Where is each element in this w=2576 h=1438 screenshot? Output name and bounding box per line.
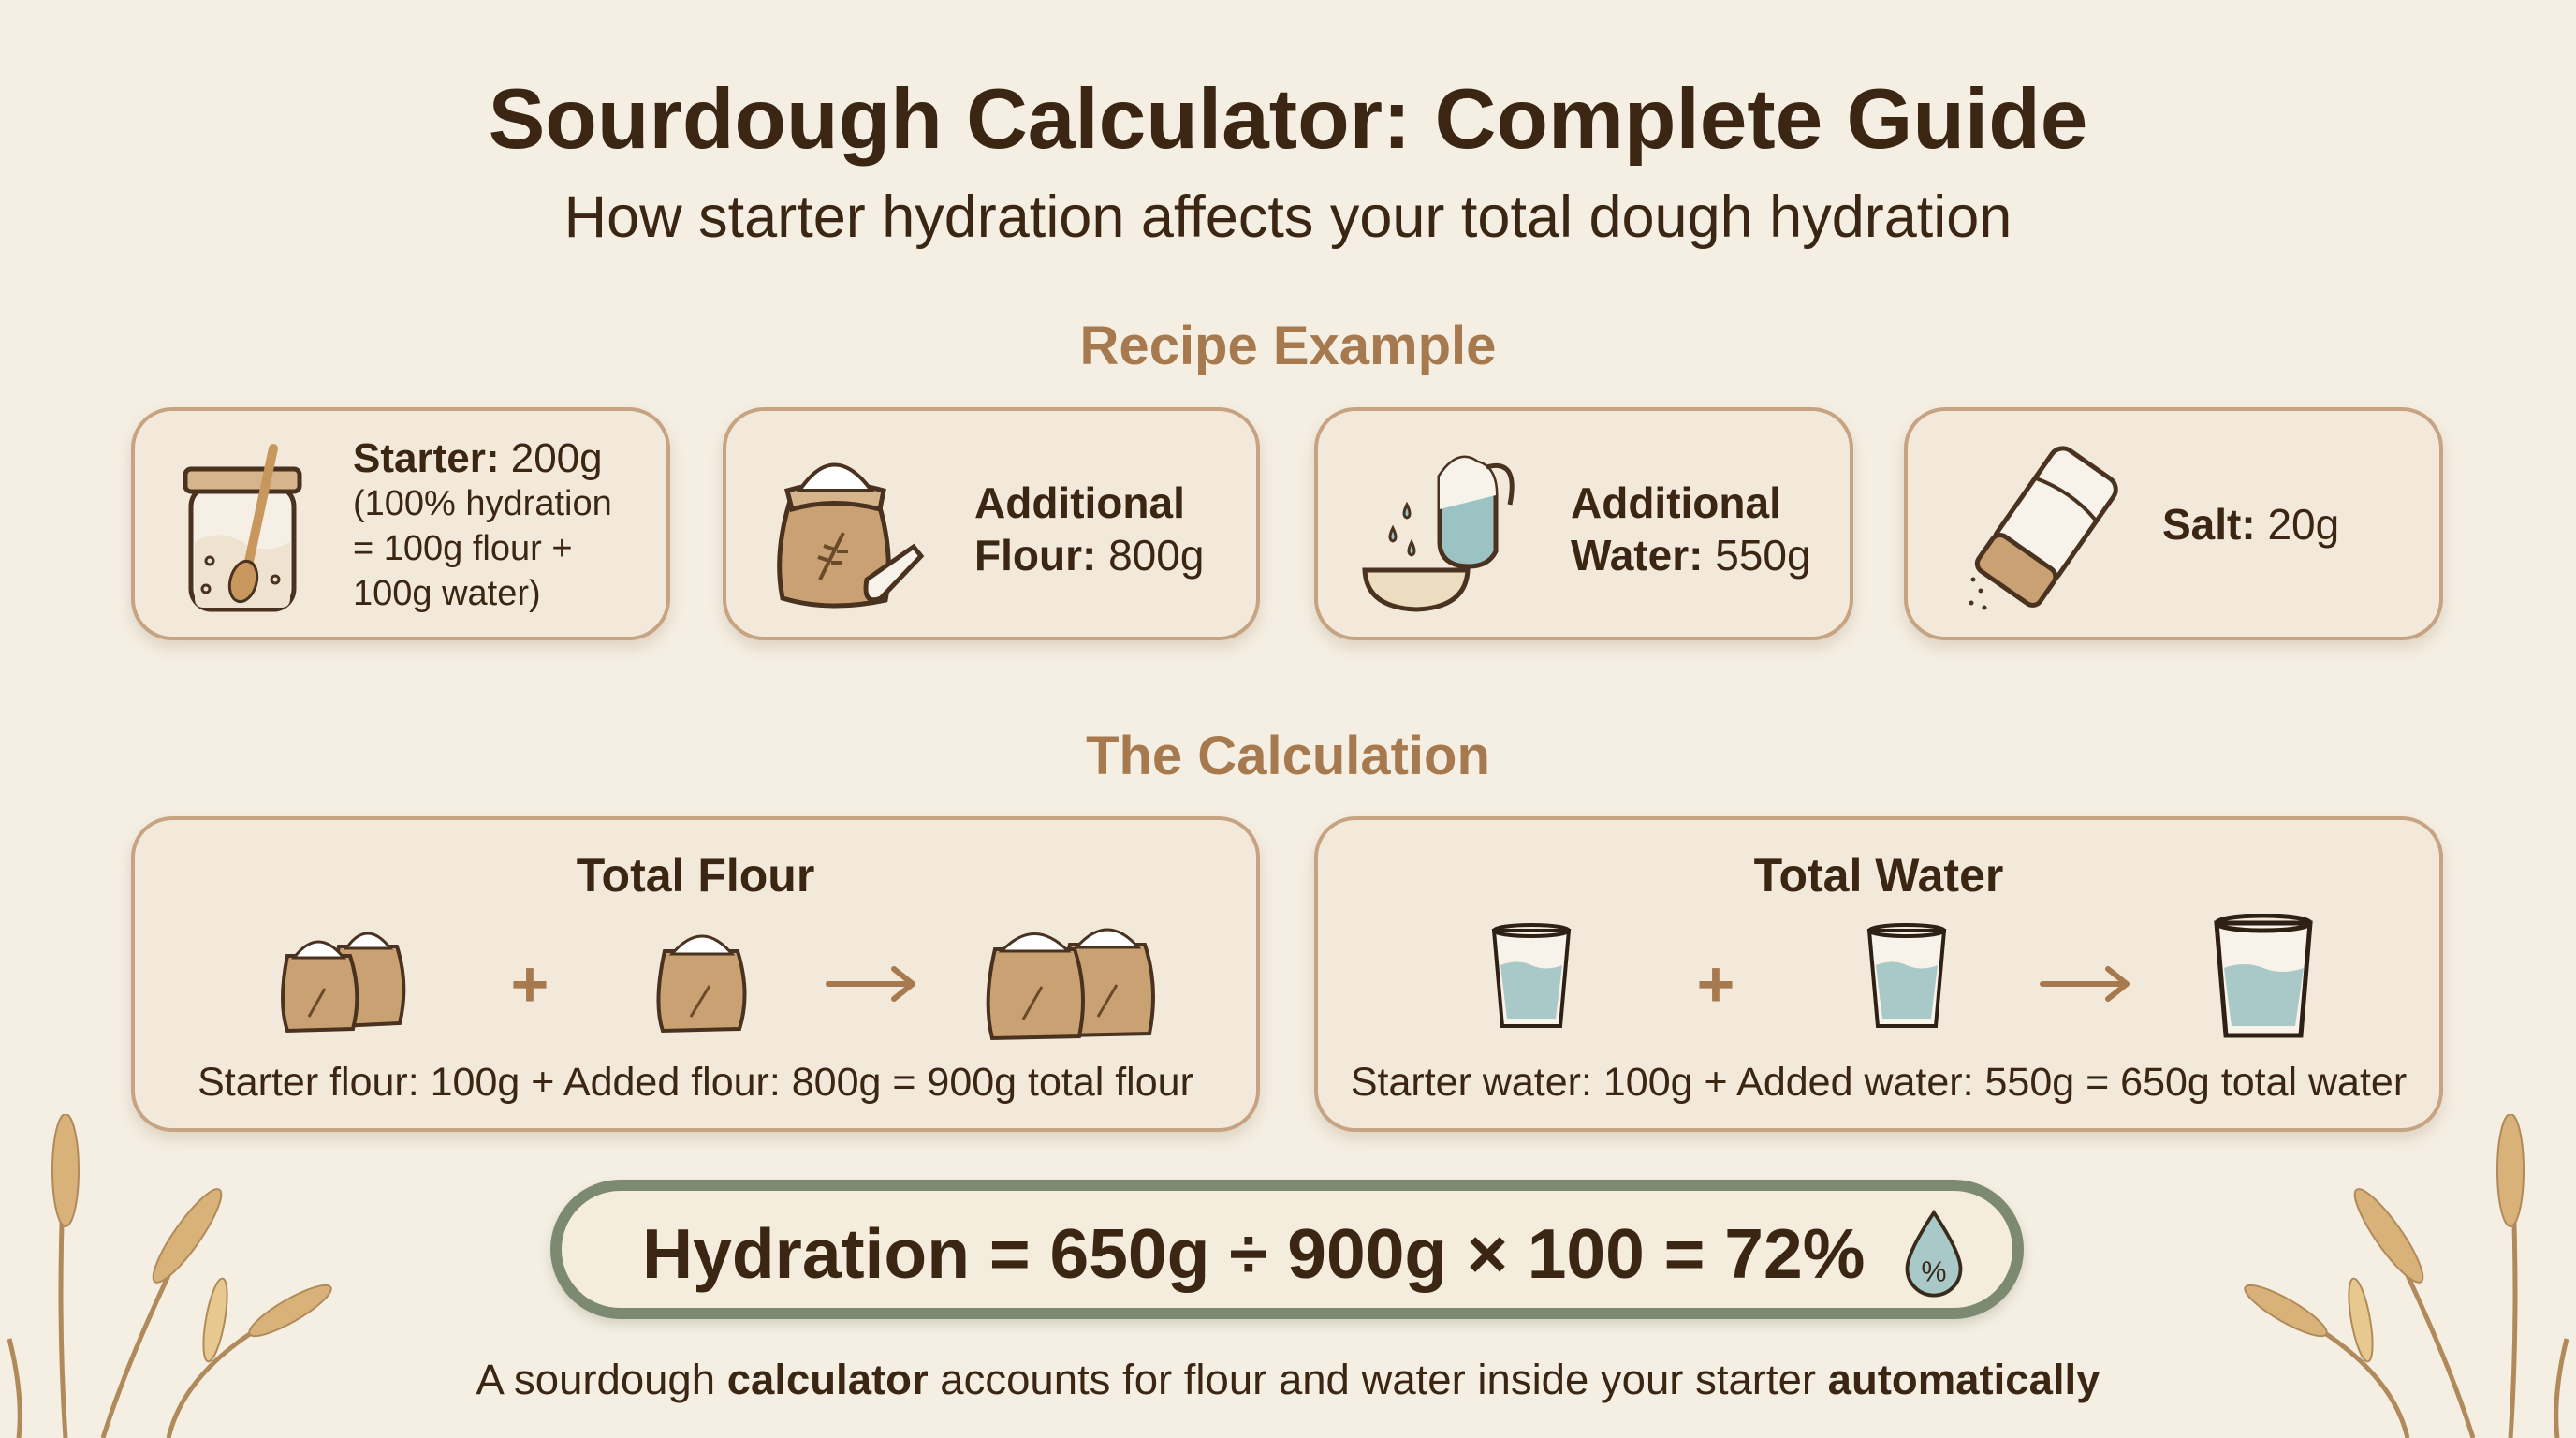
panel: total water (1314, 816, 2443, 1132)
icon: flour sack (656, 934, 747, 1033)
plus: + (1697, 947, 1734, 1020)
text: starter: = 100g flour + (353, 529, 573, 568)
text: flour: Additional (974, 478, 1185, 527)
arrow (2040, 966, 2130, 1002)
icon: two flour sacks (281, 932, 406, 1033)
card: starter (131, 407, 670, 640)
card: salt (1904, 407, 2443, 640)
decoration: wheat right (2244, 1114, 2569, 1438)
text: flour (974, 478, 1204, 580)
heading: the calculation: The Calculation (1086, 726, 1490, 786)
title: Sourdough Calculator: Complete Guide (489, 72, 2087, 167)
text: water (1571, 478, 1811, 580)
icon: jar with spoon (183, 444, 301, 612)
text: water: Additional (1571, 478, 1781, 527)
panel: total flour (131, 816, 1260, 1132)
heading: total water: Total Water (1754, 849, 2003, 902)
text: starter (353, 435, 612, 613)
icon: percent drop (1906, 1210, 1962, 1298)
card: additional water (1314, 407, 1853, 640)
footer text: A sourdough calculator accounts for flour and water inside your starter automatically (476, 1356, 2100, 1403)
icon: big flour sacks (987, 929, 1155, 1040)
text: starter: 100g water) (353, 574, 541, 613)
hydration formula pill (550, 1180, 2024, 1319)
text: salt: Salt: 20g (2162, 500, 2339, 549)
text: hydration formula: Hydration = 650g ÷ 900g × 100 = 72% (642, 1214, 1865, 1293)
arrow (826, 966, 915, 1002)
heading: total flour: Total Flour (577, 849, 814, 902)
icon: glass (1492, 923, 1571, 1028)
plus: + (511, 947, 549, 1020)
text: starter: (100% hydration (353, 484, 612, 523)
icon: salt shaker (1969, 446, 2118, 610)
text: flour: Flour: 800g (974, 531, 1204, 580)
text: starter: Starter: 200g (353, 435, 603, 481)
icon: flour sack with scoop (777, 462, 925, 609)
icon: large glass (2214, 914, 2313, 1037)
card: additional flour (723, 407, 1260, 640)
icon: percent drop: % (1921, 1255, 1947, 1287)
text: water: Water: 550g (1571, 531, 1811, 580)
icon: pitcher and bowl (1362, 455, 1515, 612)
text: flour formula: Starter flour: 100g + Added flour: 800g = 900g total flour (198, 1060, 1193, 1105)
text: water formula: Starter water: 100g + Added water: 550g = 650g total water (1351, 1060, 2407, 1105)
heading: recipe example: Recipe Example (1080, 315, 1496, 376)
decoration: wheat left (7, 1114, 332, 1438)
subtitle: How starter hydration affects your total dough hydration (564, 184, 2012, 250)
icon: glass (1866, 923, 1947, 1028)
